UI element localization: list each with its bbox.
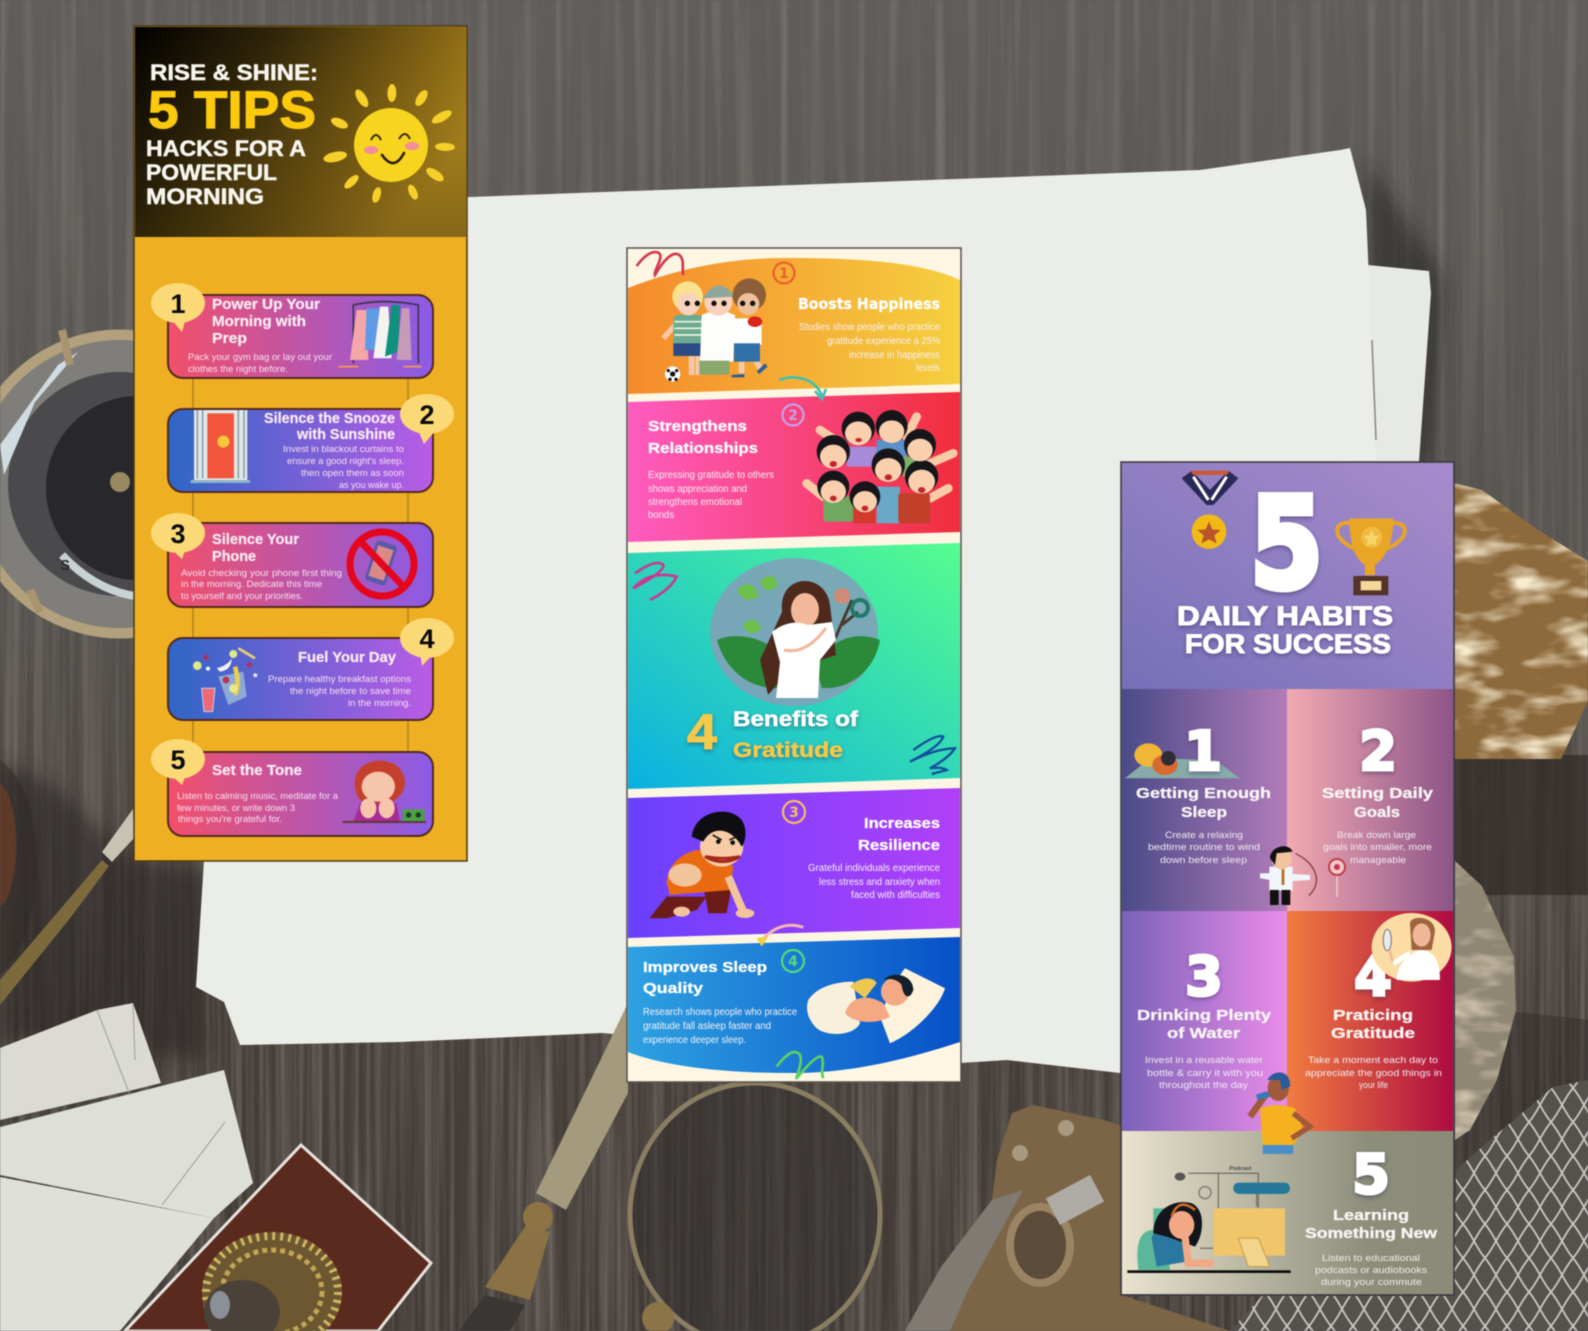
squiggle: pink xyxy=(633,563,677,600)
number 3: 3 xyxy=(1185,945,1223,1008)
text: increases resilience title xyxy=(858,815,940,854)
text: tip 1 title: Morning with xyxy=(212,313,306,330)
text: tip 5 title: Set the Tone xyxy=(212,762,302,779)
heading: 4 benefits of gratitude xyxy=(687,704,859,762)
prop: envelopes xyxy=(0,1003,253,1331)
squiggle: green xyxy=(777,1052,823,1078)
text: strengthens relationships title: Strengthens xyxy=(648,418,747,435)
text: tip 5 description: Listen to calming music, meditate for a xyxy=(177,791,338,801)
text: strengthens relationships description: bonds xyxy=(648,510,674,521)
text: tip 1 description: clothes the night before. xyxy=(188,364,288,374)
prop: oyster shells xyxy=(1454,483,1588,1140)
text: getting enough sleep description: down before sleep xyxy=(1160,855,1247,866)
text: getting enough sleep description: Create a relaxing xyxy=(1165,830,1243,841)
text: tip 2 title xyxy=(264,410,395,443)
habit 2 xyxy=(1287,689,1453,911)
badge: circled 2 xyxy=(782,404,804,426)
text: practicing gratitude title: Gratitude xyxy=(1331,1025,1415,1042)
illustration: woman hugging herself xyxy=(710,558,880,706)
text: strengthens relationships description: shows appreciation and xyxy=(648,484,747,495)
text: tip 1 title xyxy=(212,296,320,347)
text: improves sleep quality description: experience deeper sleep. xyxy=(643,1035,746,1046)
text: drinking plenty of water description: bottle & carry it with you xyxy=(1147,1068,1263,1079)
text: tip 2 title: Silence the Snooze xyxy=(264,410,395,427)
text: learning something new title: Learning xyxy=(1333,1207,1409,1224)
text: increases resilience description: faced with difficulties xyxy=(851,890,940,901)
text: practicing gratitude description: Take a moment each day to xyxy=(1308,1055,1438,1066)
arrow: peach curved xyxy=(757,925,803,947)
badge: number 1 xyxy=(151,283,205,332)
icon: phone prohibited xyxy=(350,532,414,596)
text: learning something new description: during your commute xyxy=(1321,1277,1422,1288)
text: tip 4 description: in the morning. xyxy=(348,698,411,708)
text: tip 5 description: things you're grateful for. xyxy=(178,814,282,824)
text: tip 3 description xyxy=(181,568,342,601)
text: tip 2 description: then open them as soon xyxy=(301,468,404,478)
text: tip 1 description xyxy=(188,352,332,374)
prop: leather book with gold clasp xyxy=(125,1145,431,1331)
heading: 4 benefits of gratitude: 4 xyxy=(687,704,717,760)
band 1: boosts happiness xyxy=(628,258,960,394)
prop: stacked paper sheets xyxy=(196,148,1445,1075)
illustration: group of happy kids xyxy=(807,410,953,523)
text: learning something new description: podcasts or audiobooks xyxy=(1315,1265,1427,1276)
text: getting enough sleep description: bedtime routine to wind xyxy=(1148,842,1260,853)
illustration: woman with mirror xyxy=(1372,913,1452,982)
text: learning something new title xyxy=(1305,1207,1437,1242)
icon: fruit smoothie xyxy=(193,648,257,712)
badge: circled 4: 4 xyxy=(788,954,798,970)
illustration: woman listening to podcast: Podcast xyxy=(1229,1166,1251,1172)
text: tip 4 title: Fuel Your Day xyxy=(298,649,397,666)
text: increases resilience description: less stress and anxiety when xyxy=(819,877,940,888)
text: setting daily goals description: goals into smaller, more xyxy=(1323,842,1432,853)
text: improves sleep quality title xyxy=(643,959,767,997)
text: boosts happiness description: gratitude experience a 25% xyxy=(827,336,940,347)
text: tip 5 description: few minutes, or write down 3 xyxy=(177,803,295,813)
heading: rise and shine: HACKS FOR A xyxy=(146,136,306,161)
band 3: central title xyxy=(628,543,960,789)
text: drinking plenty of water title: Drinking Plenty xyxy=(1137,1007,1272,1024)
habit 1 xyxy=(1122,689,1287,911)
text: tip 4 description: the night before to save time xyxy=(290,686,411,696)
prop: fishing net xyxy=(1230,1080,1588,1331)
heading: 4 benefits of gratitude: Benefits of xyxy=(733,708,859,731)
text: learning something new description: Listen to educational xyxy=(1322,1253,1420,1264)
text: setting daily goals description: manageable xyxy=(1350,855,1406,866)
text: tip 2 description: Invest in blackout curtains to xyxy=(283,444,404,454)
prop: ink pen and copper dish xyxy=(0,760,134,1005)
icon: girl listening to music xyxy=(343,761,426,823)
prop: letter opener xyxy=(459,1003,628,1331)
text: boosts happiness description xyxy=(799,322,940,374)
heading: big five: 5 xyxy=(1250,470,1323,617)
icon: smiling sun xyxy=(322,84,455,204)
illustration: three children xyxy=(663,278,768,382)
number 2: 2 xyxy=(1359,720,1397,783)
text: strengthens relationships title: Relationships xyxy=(648,440,758,457)
squiggle: blue xyxy=(910,736,955,774)
heading: daily habits for success: DAILY HABITS xyxy=(1177,601,1393,631)
icon: target on stick xyxy=(1329,859,1345,897)
prop: brass instrument xyxy=(905,1105,1230,1331)
text: tip 2 description xyxy=(283,444,404,490)
badge: number 1: 1 xyxy=(170,289,186,319)
text: tip 3 title xyxy=(212,531,299,565)
prop: magnifying glass xyxy=(630,1083,880,1331)
text: setting daily goals title: Setting Daily xyxy=(1322,785,1434,802)
text: setting daily goals title: Goals xyxy=(1354,804,1400,821)
text: drinking plenty of water description: Invest in a reusable water xyxy=(1145,1055,1263,1066)
text: tip 1 title: Prep xyxy=(212,330,247,347)
badge: number 2: 2 xyxy=(419,400,435,430)
text: practicing gratitude description xyxy=(1305,1055,1442,1091)
text: getting enough sleep title: Getting Enough xyxy=(1136,785,1271,802)
text: tip 2 description: ensure a good night's sleep. xyxy=(287,456,404,466)
band 4: increases resilience xyxy=(628,788,960,938)
illustration: sleeping on a mat xyxy=(1125,743,1240,778)
number 5: 5 xyxy=(1352,1143,1390,1206)
heading: 4 benefits of gratitude: Gratitude xyxy=(733,739,843,762)
badge: number 3: 3 xyxy=(170,519,186,549)
text: improves sleep quality title: Quality xyxy=(643,980,704,997)
tip 5 xyxy=(151,739,433,836)
text: increases resilience description xyxy=(808,863,940,901)
badge: number 5 xyxy=(151,739,205,785)
text: strengthens relationships title xyxy=(648,418,758,457)
badge: circled 1 xyxy=(774,262,794,284)
prop: compass: S xyxy=(60,557,70,574)
text: tip 4 description xyxy=(268,674,412,708)
text: practicing gratitude description: appreciate the good things in xyxy=(1305,1068,1442,1079)
text: getting enough sleep title: Sleep xyxy=(1181,804,1227,821)
text: drinking plenty of water description: throughout the day xyxy=(1159,1080,1248,1091)
badge: circled 1: 1 xyxy=(779,266,789,282)
text: tip 5 description xyxy=(177,791,338,824)
text: setting daily goals title xyxy=(1322,785,1434,821)
text: tip 4 description: Prepare healthy breakfast options xyxy=(268,674,412,684)
text: practicing gratitude description: your life xyxy=(1359,1080,1388,1091)
text: strengthens relationships description xyxy=(648,470,774,521)
text: improves sleep quality description: gratitude fall asleep faster and xyxy=(643,1021,771,1032)
text: drinking plenty of water title xyxy=(1137,1007,1272,1042)
text: increases resilience description: Grateful individuals experience xyxy=(808,863,940,874)
tip 3 xyxy=(151,513,433,607)
heading: rise and shine xyxy=(146,60,318,209)
text: boosts happiness description: increase in happiness xyxy=(849,350,940,361)
text: tip 3 description: in the morning. Dedicate this time xyxy=(181,579,322,589)
text: strengthens relationships description: Expressing gratitude to others xyxy=(648,470,774,481)
text: getting enough sleep title xyxy=(1136,785,1271,821)
badge: number 3 xyxy=(151,513,205,559)
badge: number 4: 4 xyxy=(419,624,435,654)
heading: rise and shine: RISE & SHINE: xyxy=(150,60,318,85)
text: strengthens relationships description: strengthens emotional xyxy=(648,497,742,508)
text: improves sleep quality description: Research shows people who practice xyxy=(643,1007,797,1018)
text: tip 1 description: Pack your gym bag or lay out your xyxy=(188,352,332,362)
heading: daily habits for success: FOR SUCCESS xyxy=(1185,629,1391,659)
text: tip 3 description: to yourself and your priorities. xyxy=(181,591,303,601)
text: drinking plenty of water title: of Water xyxy=(1167,1025,1240,1042)
tip 2 xyxy=(168,394,454,492)
badge: number 2 xyxy=(400,394,454,444)
panel: rise and shine infographic xyxy=(134,26,467,861)
band 5: improves sleep quality xyxy=(628,937,960,1073)
illustration: determined boy xyxy=(649,812,754,918)
illustration: woman listening to podcast xyxy=(1127,1166,1291,1273)
text: getting enough sleep description xyxy=(1148,830,1260,866)
panel header xyxy=(1122,463,1453,689)
text: improves sleep quality description xyxy=(643,1007,797,1046)
connector lines between tips xyxy=(193,378,408,752)
text: practicing gratitude title: Praticing xyxy=(1333,1007,1413,1024)
text: tip 3 description: Avoid checking your phone first thing xyxy=(181,568,342,578)
icon: gold trophy xyxy=(1337,518,1405,595)
illustration: man drinking water xyxy=(1250,1072,1310,1154)
text: practicing gratitude title xyxy=(1331,1007,1415,1042)
text: learning something new title: Something New xyxy=(1305,1225,1437,1242)
arrow: teal curved xyxy=(779,377,826,399)
panel header xyxy=(135,27,466,237)
prop: compass xyxy=(0,330,269,633)
text: boosts happiness title: Boosts Happiness xyxy=(798,295,940,313)
badge: circled 3: 3 xyxy=(789,805,799,821)
text: boosts happiness description: levels xyxy=(916,363,940,374)
text: boosts happiness description: Studies show people who practice xyxy=(799,322,940,333)
text: setting daily goals description xyxy=(1323,830,1432,866)
text: setting daily goals description: Break down large xyxy=(1337,830,1416,841)
text: drinking plenty of water description xyxy=(1145,1055,1263,1091)
habit 4 xyxy=(1287,911,1453,1131)
text: tip 2 title: with Sunshine xyxy=(296,426,395,443)
heading: rise and shine: POWERFUL xyxy=(146,160,277,185)
text: tip 3 title: Phone xyxy=(212,548,256,565)
text: learning something new description xyxy=(1315,1253,1427,1288)
illustration: sleeping person xyxy=(807,968,945,1043)
habit 3 xyxy=(1122,911,1287,1131)
icon: clothes rack xyxy=(338,302,422,367)
text: improves sleep quality title: Improves Sleep xyxy=(643,959,767,976)
panel: daily habits for success infographic xyxy=(1121,462,1454,1295)
panel: benefits of gratitude infographic xyxy=(627,248,961,1082)
tip 4 xyxy=(168,618,454,720)
badge: circled 2: 2 xyxy=(788,408,798,424)
text: tip 1 title: Power Up Your xyxy=(212,296,320,313)
habit 5 xyxy=(1122,1131,1453,1294)
text: increases resilience title: Resilience xyxy=(858,837,940,854)
text: tip 3 title: Silence Your xyxy=(212,531,299,548)
number 4: 4 xyxy=(1354,945,1392,1008)
badge: number 5: 5 xyxy=(170,745,186,775)
tip 1 xyxy=(151,283,433,378)
text: tip 2 description: as you wake up. xyxy=(339,480,404,490)
heading: rise and shine: 5 TIPS xyxy=(148,81,316,140)
heading: rise and shine: MORNING xyxy=(146,184,264,209)
badge: circled 4 xyxy=(782,950,804,972)
squiggle: red xyxy=(637,252,683,275)
badge: circled 3 xyxy=(783,801,805,823)
badge: number 4 xyxy=(400,618,454,666)
number 1: 1 xyxy=(1184,720,1222,783)
illustration: archer man xyxy=(1260,846,1316,905)
icon: window with curtains xyxy=(191,410,250,483)
band 2: strengthens relationships xyxy=(628,392,960,542)
icon: gold medal xyxy=(1182,471,1238,549)
heading: daily habits for success xyxy=(1177,601,1393,659)
text: increases resilience title: Increases xyxy=(864,815,940,832)
